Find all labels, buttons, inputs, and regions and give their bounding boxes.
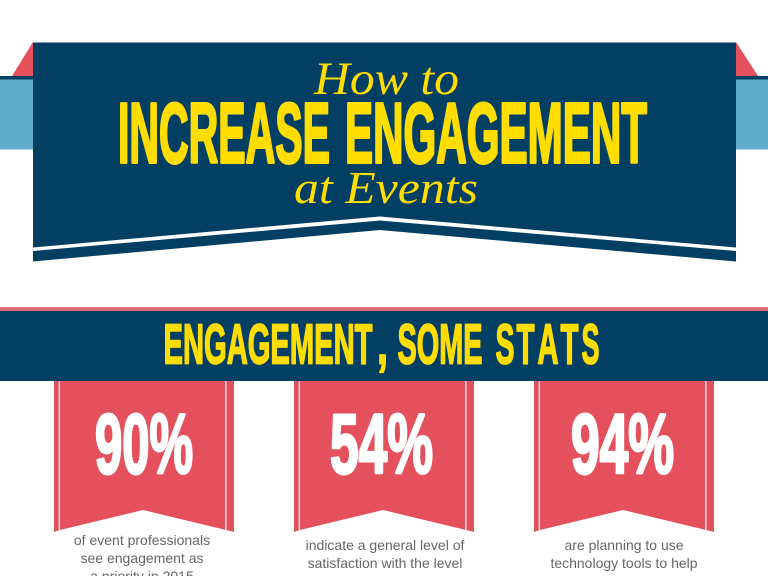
stat card: 54%	[294, 381, 474, 576]
title	[118, 53, 647, 213]
caption: of event professionals	[74, 532, 210, 548]
stat card: 90%	[54, 381, 234, 576]
stat card: 94%	[534, 381, 714, 576]
section heading: ENGAGEMENT	[164, 312, 373, 376]
title: How to	[313, 53, 459, 105]
caption: are planning to use	[564, 537, 684, 553]
section heading: A	[538, 312, 558, 376]
right ribbon fold	[736, 42, 768, 150]
caption: satisfaction with the level	[308, 555, 462, 571]
caption: see engagement as	[81, 550, 203, 566]
title: at Events	[294, 163, 478, 213]
ribbon	[54, 381, 234, 532]
section header	[0, 307, 768, 381]
left ribbon fold	[0, 42, 33, 150]
section heading: T	[560, 312, 579, 376]
number: 54%	[330, 397, 433, 491]
main banner	[33, 42, 736, 262]
ribbon	[534, 381, 714, 532]
header ribbon	[0, 42, 768, 262]
section header: S	[582, 312, 600, 376]
section heading: S	[496, 312, 514, 376]
caption: technology tools to help	[550, 555, 698, 571]
section heading: SOME	[398, 312, 482, 376]
number: 90%	[95, 397, 193, 491]
section heading: ,	[377, 312, 388, 376]
caption: indicate a general level of	[306, 537, 464, 553]
title: INCREASE	[118, 86, 330, 182]
section heading: T	[516, 312, 535, 376]
banner white stripe	[33, 216, 736, 251]
number: 94%	[571, 397, 674, 491]
ribbon	[294, 381, 474, 532]
